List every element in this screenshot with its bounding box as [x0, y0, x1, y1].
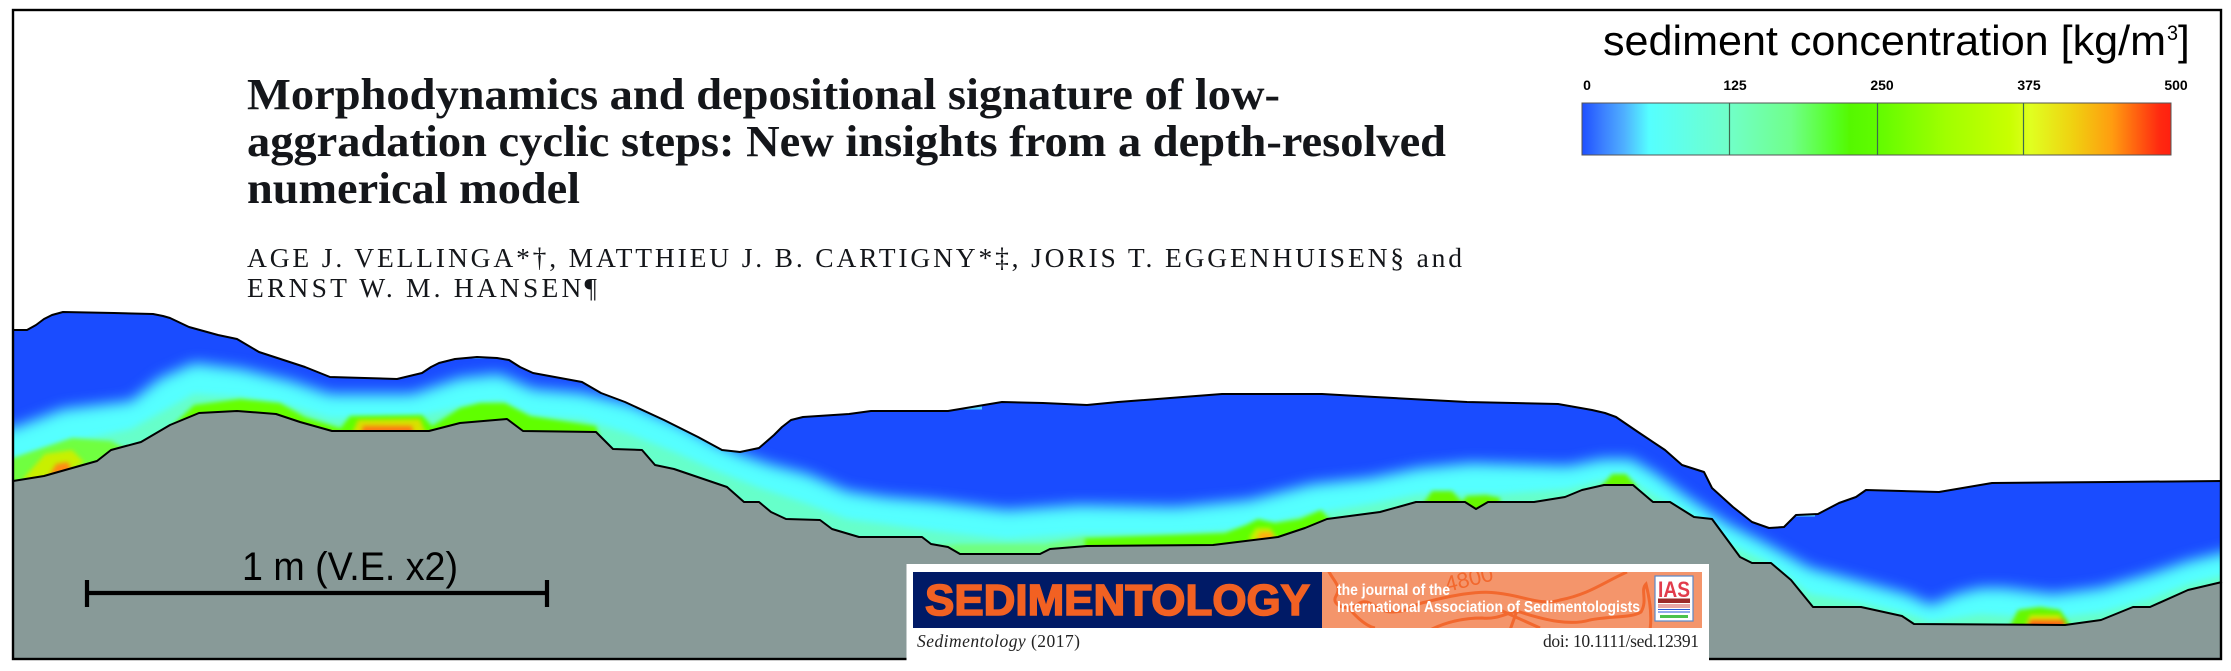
society text	[1337, 582, 1640, 616]
surface wisps	[472, 358, 1815, 516]
citation: Sedimentology (2017)	[917, 631, 1080, 651]
title: numerical model	[247, 164, 580, 213]
sediment bed	[13, 411, 2222, 659]
flow body: low concentration blue	[14, 313, 2220, 624]
legend title: 3	[2167, 22, 2178, 45]
navy masthead: SEDIMENTOLOGY	[925, 576, 1310, 625]
society text: International Association of Sedimentologists	[1337, 599, 1640, 616]
icon: IAS logo: IAS	[1658, 577, 1690, 602]
concentration field: yellow and orange hot spots at the bed	[22, 419, 2066, 630]
legend title: sediment concentration [kg/m	[1603, 17, 2166, 64]
scale bar	[87, 545, 547, 607]
flow top outline	[13, 312, 2222, 528]
bed surface outline	[13, 411, 2222, 625]
legend tick labels: 0	[1583, 77, 1591, 93]
title: aggradation cyclic steps: New insights from a depth-resolved	[247, 117, 1446, 166]
legend title: ]	[2178, 17, 2190, 64]
concentration field: blue to cyan transition	[14, 353, 2220, 624]
map squiggles	[1328, 570, 1651, 630]
society text: the journal of the	[1337, 582, 1450, 599]
authors: ERNST W. M. HANSEN¶	[247, 272, 598, 303]
map label in banner: 4800	[1442, 561, 1496, 597]
legend tick labels	[1583, 77, 2188, 93]
concentration field: green high-concentration patches	[0, 399, 2072, 628]
title	[247, 70, 1446, 213]
icon: IAS logo	[1655, 576, 1693, 621]
orange society panel	[1322, 572, 1702, 628]
legend tick labels: 250	[1870, 77, 1894, 93]
authors	[247, 242, 1462, 303]
concentration field: aquamarine near-bed band	[80, 391, 2220, 624]
doi: doi: 10.1111/sed.12391	[1543, 631, 1699, 651]
authors: AGE J. VELLINGA*†, MATTHIEU J. B. CARTIGNY*‡, JORIS T. EGGENHUISEN§ and	[247, 242, 1462, 273]
legend tick labels: 375	[2017, 77, 2041, 93]
model section: turbidity current over bed	[0, 300, 2231, 671]
journal banner box	[906, 561, 1709, 661]
legend: sediment concentration	[1582, 17, 2190, 155]
colour bar	[1582, 103, 2171, 155]
legend tick labels: 125	[1723, 77, 1747, 93]
legend tick labels: 500	[2164, 77, 2188, 93]
title: Morphodynamics and depositional signature of low-	[247, 70, 1280, 119]
scale bar label: 1 m (V.E. x2)	[242, 545, 458, 589]
scale bar line	[87, 580, 547, 607]
